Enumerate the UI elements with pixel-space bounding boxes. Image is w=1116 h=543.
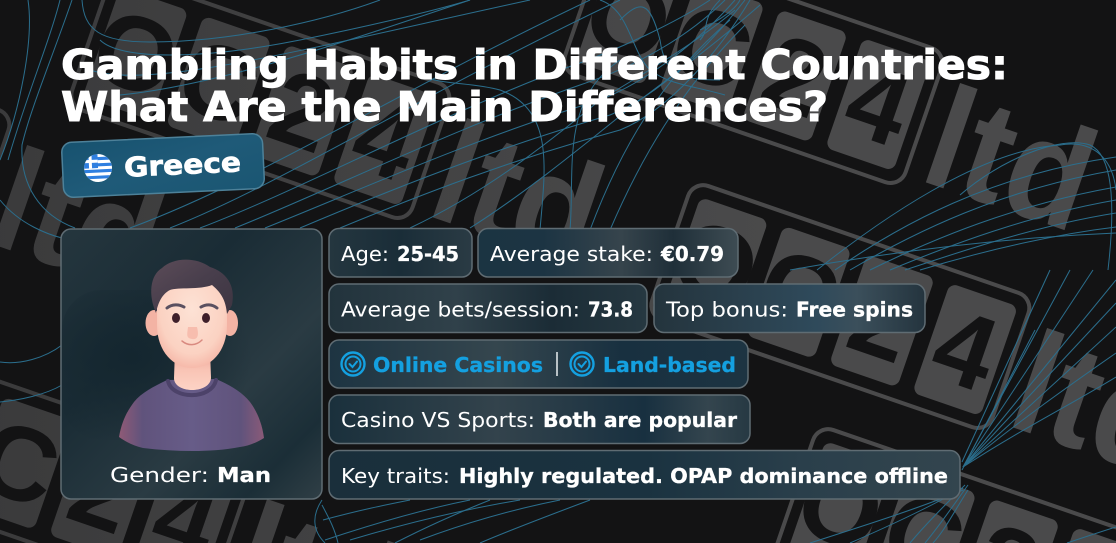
panel: avatar — [61, 229, 322, 499]
face details — [167, 305, 184, 308]
stat: key traits — [329, 450, 960, 499]
stat: top bonus: Free spins — [796, 298, 913, 322]
icon: check land-based — [570, 352, 594, 376]
gender label: Gender: — [110, 463, 209, 487]
title: Gambling Habits in Different Countries: — [61, 41, 1008, 89]
icon: Greek flag — [83, 153, 113, 183]
stat: key traits: Key traits: — [341, 464, 450, 488]
stat: casino vs sports — [329, 395, 750, 444]
title — [61, 41, 1008, 131]
hair — [151, 260, 233, 314]
label: online casinos: Online Casinos — [373, 353, 543, 377]
title: What Are the Main Differences? — [61, 83, 828, 131]
country badge: Greece — [61, 133, 265, 198]
stat: key traits: Highly regulated. OPAP dominance offline — [459, 464, 948, 488]
stat: venues — [329, 340, 748, 388]
stat: average bets per session: Average bets/session: — [341, 298, 580, 322]
country name: Greece — [123, 147, 242, 184]
gender label: Man — [217, 463, 271, 487]
stat: age: 25-45 — [397, 242, 459, 266]
stat: casino vs sports: Casino VS Sports: — [341, 408, 535, 432]
stat: age: Age: — [341, 242, 389, 266]
stat: top bonus: Top bonus: — [665, 298, 788, 322]
stat: average stake: €0.79 — [660, 242, 724, 266]
stat: average stake: Average stake: — [490, 242, 653, 266]
collar — [168, 380, 216, 395]
label: land-based: Land-based — [603, 353, 736, 377]
stat: casino vs sports: Both are popular — [543, 408, 737, 432]
icon: check online casinos — [342, 352, 364, 376]
stat: average bets per session — [329, 284, 647, 332]
shirt — [119, 379, 264, 451]
stat: age — [329, 228, 472, 277]
stat: top bonus — [654, 284, 925, 332]
stat: average stake — [478, 228, 738, 277]
stat: average bets per session: 73.8 — [588, 298, 633, 322]
ears — [146, 310, 162, 336]
avatar illustration — [119, 260, 264, 451]
neck — [174, 350, 211, 390]
head — [157, 270, 227, 368]
gender label — [110, 463, 271, 487]
